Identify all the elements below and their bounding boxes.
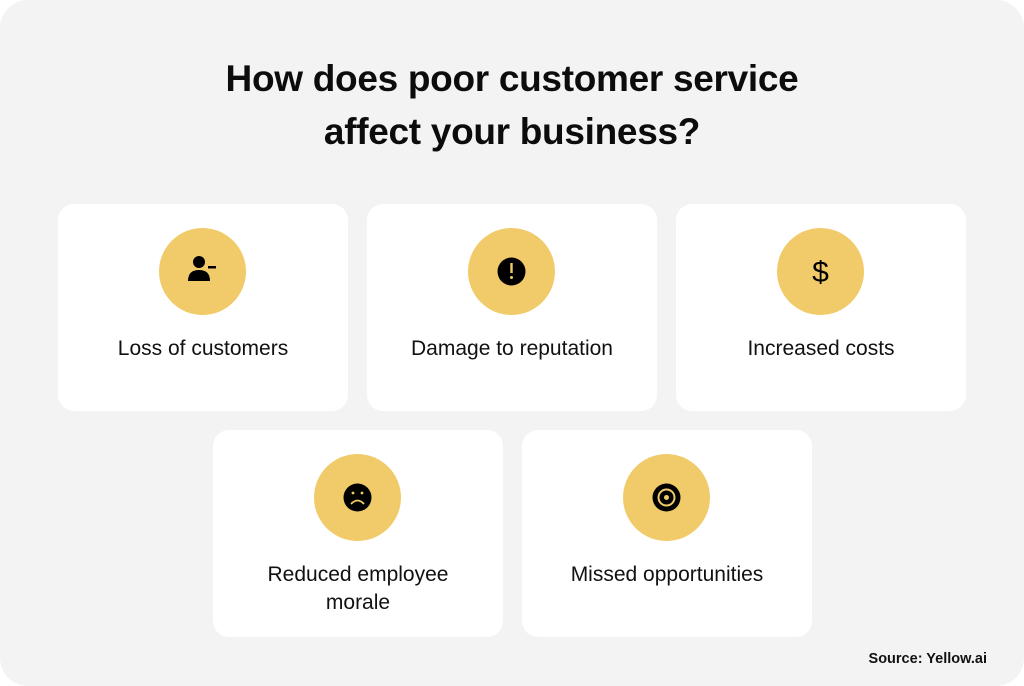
icon: dollar <box>777 228 864 315</box>
card: loss of customers: Loss of customers <box>118 337 288 360</box>
card: loss of customers <box>58 204 348 411</box>
card: damage to reputation <box>367 204 657 411</box>
icon: sad face <box>314 454 401 541</box>
card: reduced employee morale <box>213 430 503 637</box>
icon: target <box>623 454 710 541</box>
card: missed opportunities <box>522 430 812 637</box>
card: damage to reputation: Damage to reputation <box>411 337 613 360</box>
icon: alert <box>468 228 555 315</box>
source: Source: Yellow.ai <box>869 651 987 667</box>
card: increased costs <box>676 204 966 411</box>
title <box>226 58 798 152</box>
card: increased costs: Increased costs <box>747 337 895 360</box>
card: missed opportunities: Missed opportunities <box>571 563 763 586</box>
icon: person minus <box>159 228 246 315</box>
title: affect your business? <box>324 111 700 152</box>
card: reduced employee morale: Reduced employee <box>268 563 448 586</box>
title: How does poor customer service <box>226 58 798 99</box>
card: reduced employee morale: morale <box>326 591 390 614</box>
icon: dollar: $ <box>812 256 829 289</box>
